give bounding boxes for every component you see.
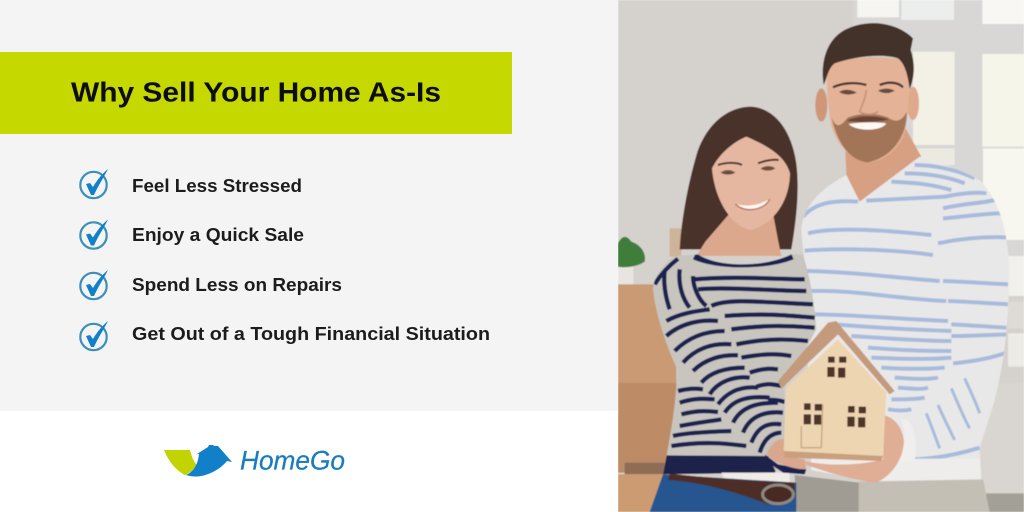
man sweater xyxy=(801,156,1009,482)
man cuff xyxy=(899,442,916,460)
woman cuff xyxy=(765,454,806,474)
logo wordmark: HomeGo xyxy=(240,446,345,476)
man face xyxy=(826,57,909,162)
plant and pot xyxy=(618,237,645,288)
woman face xyxy=(712,137,790,230)
item: spend less on repairs xyxy=(80,270,342,299)
logo: HomeGo xyxy=(164,445,345,477)
woman eyebrows and eyes xyxy=(718,160,779,165)
woman belt xyxy=(668,473,795,504)
house roof xyxy=(778,321,895,394)
upper window xyxy=(827,357,846,378)
wall background xyxy=(618,0,1024,512)
photo: couple holding model house xyxy=(618,0,1024,512)
woman hair xyxy=(680,107,798,249)
man neck xyxy=(845,127,921,203)
title: Why Sell Your Home As-Is xyxy=(71,76,441,108)
woman jeans xyxy=(650,474,796,512)
panel: logo footer xyxy=(0,411,618,512)
person: man xyxy=(795,23,1021,512)
icon: wooden model house xyxy=(778,321,895,461)
house door xyxy=(801,404,823,448)
house walls xyxy=(784,339,886,456)
woman smile xyxy=(735,199,770,210)
item: get out of a tough financial situation: Get Out of a Tough Financial Situation xyxy=(132,324,490,344)
heading band xyxy=(0,52,512,134)
item: feel less stressed xyxy=(80,169,302,198)
cardboard boxes xyxy=(618,284,676,512)
man beard xyxy=(831,112,907,162)
panel: left background xyxy=(0,0,618,411)
woman hand xyxy=(766,439,806,469)
checklist xyxy=(80,169,490,350)
man hair xyxy=(823,23,914,89)
house base xyxy=(784,451,883,461)
lower right window xyxy=(847,406,866,427)
man trousers xyxy=(794,474,860,512)
item: enjoy a quick sale xyxy=(80,220,304,249)
woman neck and chest xyxy=(696,213,781,256)
man ears xyxy=(815,88,827,122)
window xyxy=(853,0,1024,512)
icon: logo mark xyxy=(164,445,232,477)
belt buckle xyxy=(763,485,793,504)
person: woman xyxy=(680,107,798,256)
frame on shelf xyxy=(670,228,681,257)
item: feel less stressed: Feel Less Stressed xyxy=(132,176,302,196)
man nose xyxy=(860,90,878,114)
item: get out of a tough financial situation xyxy=(80,321,490,350)
item: enjoy a quick sale: Enjoy a Quick Sale xyxy=(132,225,304,245)
lower left window xyxy=(804,403,822,425)
woman sweater xyxy=(650,253,820,479)
item: spend less on repairs: Spend Less on Repairs xyxy=(132,275,342,295)
man eyebrows and eyes xyxy=(833,83,903,87)
man hands xyxy=(805,415,904,483)
woman shirt hem xyxy=(721,473,790,483)
